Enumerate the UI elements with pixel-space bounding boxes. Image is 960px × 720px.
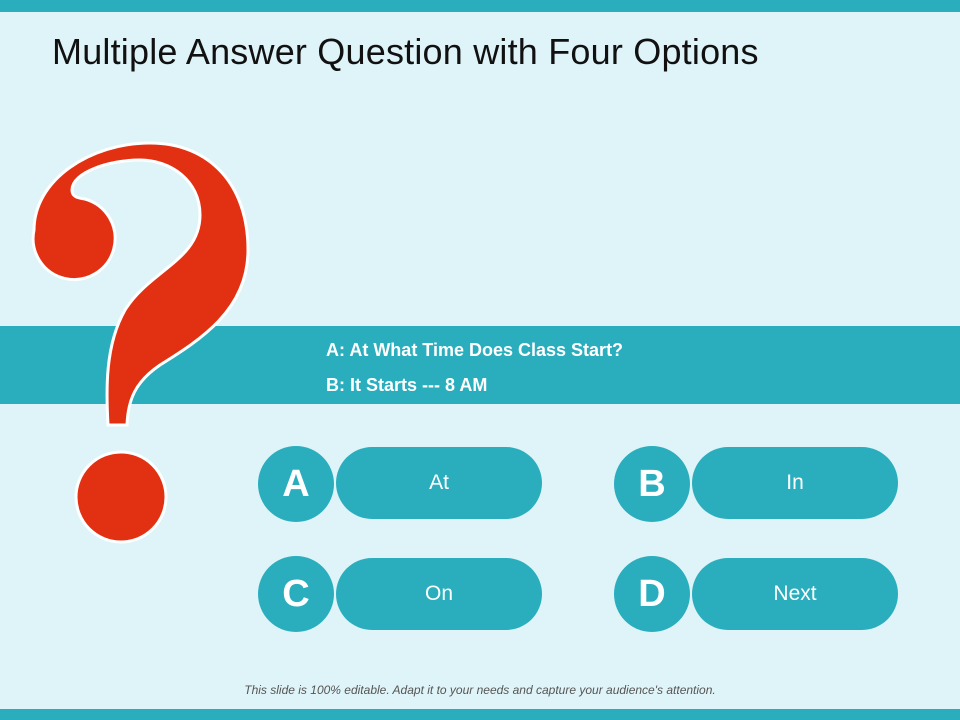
footer note: This slide is 100% editable. Adapt it to your needs and capture your audience's attention. xyxy=(244,683,716,697)
text: At xyxy=(429,471,449,494)
text: A xyxy=(282,463,310,505)
option D xyxy=(614,556,898,632)
option C xyxy=(258,556,542,632)
text: In xyxy=(786,471,804,494)
question text xyxy=(326,340,623,395)
title: Multiple Answer Question with Four Options xyxy=(52,31,759,72)
option A xyxy=(258,446,542,522)
text: C xyxy=(282,573,310,615)
text: On xyxy=(425,582,453,605)
text: B xyxy=(638,463,666,505)
text: D xyxy=(638,573,666,615)
text: Next xyxy=(773,582,817,605)
option B xyxy=(614,446,898,522)
question band xyxy=(0,326,960,404)
question text: A: At What Time Does Class Start? xyxy=(326,340,623,360)
icon: question mark xyxy=(32,142,250,544)
question text: B: It Starts --- 8 AM xyxy=(326,375,487,395)
